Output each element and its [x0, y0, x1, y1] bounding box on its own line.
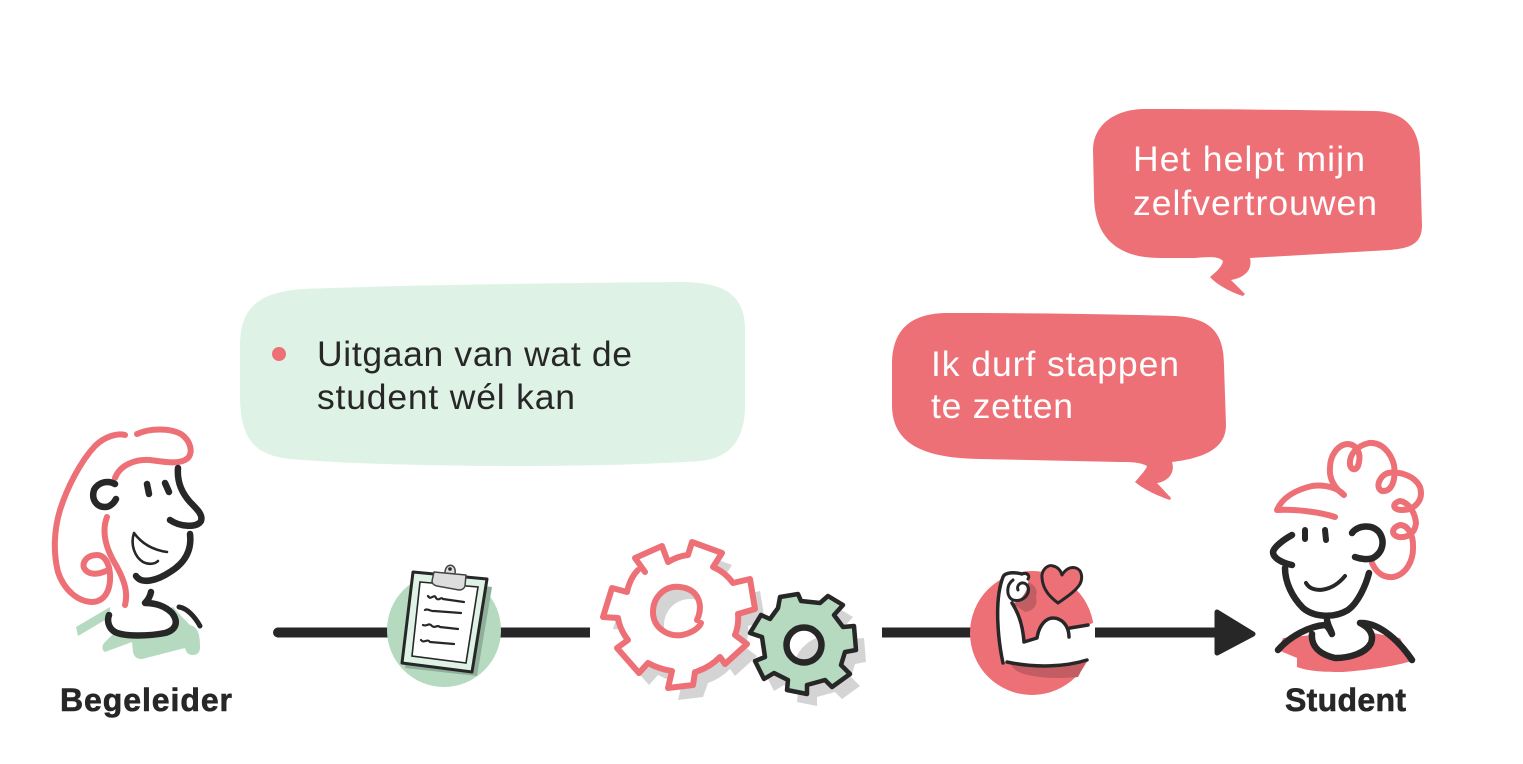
face lines — [1273, 526, 1412, 660]
green ground scribble — [76, 607, 200, 659]
text: begeleider point: student wél kan — [317, 377, 575, 417]
timeline arrow — [273, 612, 1253, 653]
small green gear — [750, 594, 856, 694]
smile — [133, 533, 167, 564]
label: Student: Student — [1285, 682, 1406, 718]
arm shadow — [1010, 582, 1088, 678]
bicep curl — [1008, 573, 1029, 601]
text: Het helpt mijn zelfvertrouwen: zelfvertrouwen — [1133, 183, 1377, 223]
text: Ik durf stappen te zetten: Ik durf stappen — [931, 344, 1179, 384]
body white fill — [108, 603, 176, 636]
speech bubble: Het helpt mijn zelfvertrouwen — [1093, 109, 1422, 296]
clip — [432, 565, 466, 590]
text: begeleider point: Uitgaan van wat de — [317, 334, 632, 374]
text: Het helpt mijn zelfvertrouwen: Het helpt mijn — [1133, 139, 1365, 179]
panel: green speech box — [240, 282, 745, 466]
arm — [998, 572, 1095, 665]
text: Ik durf stappen te zetten: te zetten — [931, 386, 1073, 426]
speech bubble: Ik durf stappen — [892, 313, 1226, 500]
gear shadows — [613, 554, 765, 700]
pink shirt — [1278, 633, 1412, 672]
hair — [55, 430, 191, 605]
character: begeleider — [55, 430, 201, 659]
icon: strong arm with heart — [970, 566, 1095, 695]
clipboard board — [402, 572, 487, 672]
icon: gears — [603, 542, 866, 706]
curly hair — [1277, 443, 1421, 577]
paper — [412, 582, 478, 663]
large pink gear — [603, 542, 755, 688]
bullet — [272, 347, 286, 361]
face lines — [93, 468, 201, 636]
clipboard shadow — [405, 578, 492, 676]
heart — [1042, 566, 1082, 603]
checklist lines — [421, 596, 464, 644]
icon: clipboard — [387, 565, 501, 687]
character: student — [1273, 443, 1421, 672]
label: Begeleider: Begeleider — [60, 682, 232, 718]
